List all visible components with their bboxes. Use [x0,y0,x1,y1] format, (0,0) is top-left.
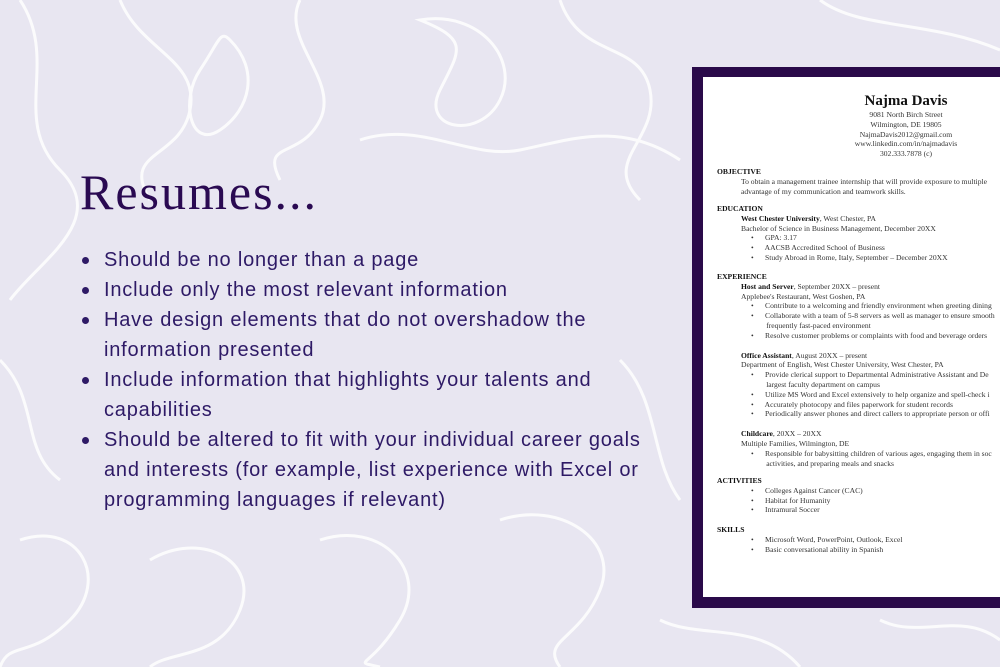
experience: Host and Server, September 20XX – present [741,282,880,291]
resume header: Wilmington, DE 19805 [870,120,942,129]
experience: frequently fast-paced environment [766,321,871,330]
bullet list: Include information that highlights your talents and capabilities [104,369,591,421]
bullet list: Should be no longer than a page [104,249,419,271]
resume header: www.linkedin.com/in/najmadavis [855,139,957,148]
resume header: NajmaDavis2012@gmail.com [860,130,952,139]
experience: • Utilize MS Word and Excel extensively to help organize and spell-check i [751,390,990,399]
education [717,204,948,262]
experience: largest faculty department on campus [766,380,880,389]
skills: • Microsoft Word, PowerPoint, Outlook, Excel [751,535,902,544]
resume header [854,93,957,158]
bullet list: Have design elements that do not overshadow the information presented [104,309,586,361]
education: • GPA: 3.17 [751,233,797,242]
experience: Childcare, 20XX – 20XX [741,429,821,438]
resume header: 302.333.7878 (c) [880,149,932,158]
experience: EXPERIENCE [717,272,767,281]
resume header: 9081 North Birch Street [869,110,943,119]
experience: activities, and preparing meals and snacks [766,459,894,468]
objective: OBJECTIVE [717,167,761,176]
skills [717,525,902,554]
experience: Office Assistant, August 20XX – present [741,351,867,360]
activities: ACTIVITIES [717,476,762,485]
activities: • Colleges Against Cancer (CAC) [751,486,863,495]
education: West Chester University, West Chester, PA [741,214,876,223]
experience: Multiple Families, Wilmington, DE [741,439,849,448]
experience: Department of English, West Chester University, West Chester, PA [741,360,944,369]
objective [717,167,987,196]
education: EDUCATION [717,204,763,213]
objective: advantage of my communication and teamwork skills. [741,187,906,196]
title: Resumes... [80,164,318,220]
experience: • Contribute to a welcoming and friendly environment when greeting dining [751,301,992,310]
bullet list: Should be altered to fit with your individual career goals and interests (for example, list experience with Excel or programming languages if relevant) [104,429,641,511]
bullet list: Include only the most relevant information [104,279,508,301]
activities [717,476,863,514]
activities: • Intramural Soccer [751,505,820,514]
bullet list [82,249,641,511]
experience: • Responsible for babysitting children of various ages, engaging them in soc [751,449,992,458]
experience: Applebee's Restaurant, West Goshen, PA [741,292,865,301]
experience: • Accurately photocopy and files paperwork for student records [751,400,953,409]
education: • AACSB Accredited School of Business [751,243,885,252]
skills: • Basic conversational ability in Spanish [751,545,883,554]
resume sample [692,67,1000,608]
education: Bachelor of Science in Business Management, December 20XX [741,224,936,233]
experience: • Periodically answer phones and direct callers to appropriate person or offi [751,409,990,418]
experience: • Collaborate with a team of 5-8 servers as well as manager to ensure smooth [751,311,995,320]
experience: • Provide clerical support to Departmental Administrative Assistant and De [751,370,989,379]
resume header: Najma Davis [865,93,947,109]
skills: SKILLS [717,525,744,534]
education: • Study Abroad in Rome, Italy, September – December 20XX [751,253,948,262]
activities: • Habitat for Humanity [751,496,830,505]
experience [717,272,995,468]
experience: • Resolve customer problems or complaints with food and beverage orders [751,331,987,340]
objective: To obtain a management trainee internship that will provide exposure to multiple [741,177,987,186]
